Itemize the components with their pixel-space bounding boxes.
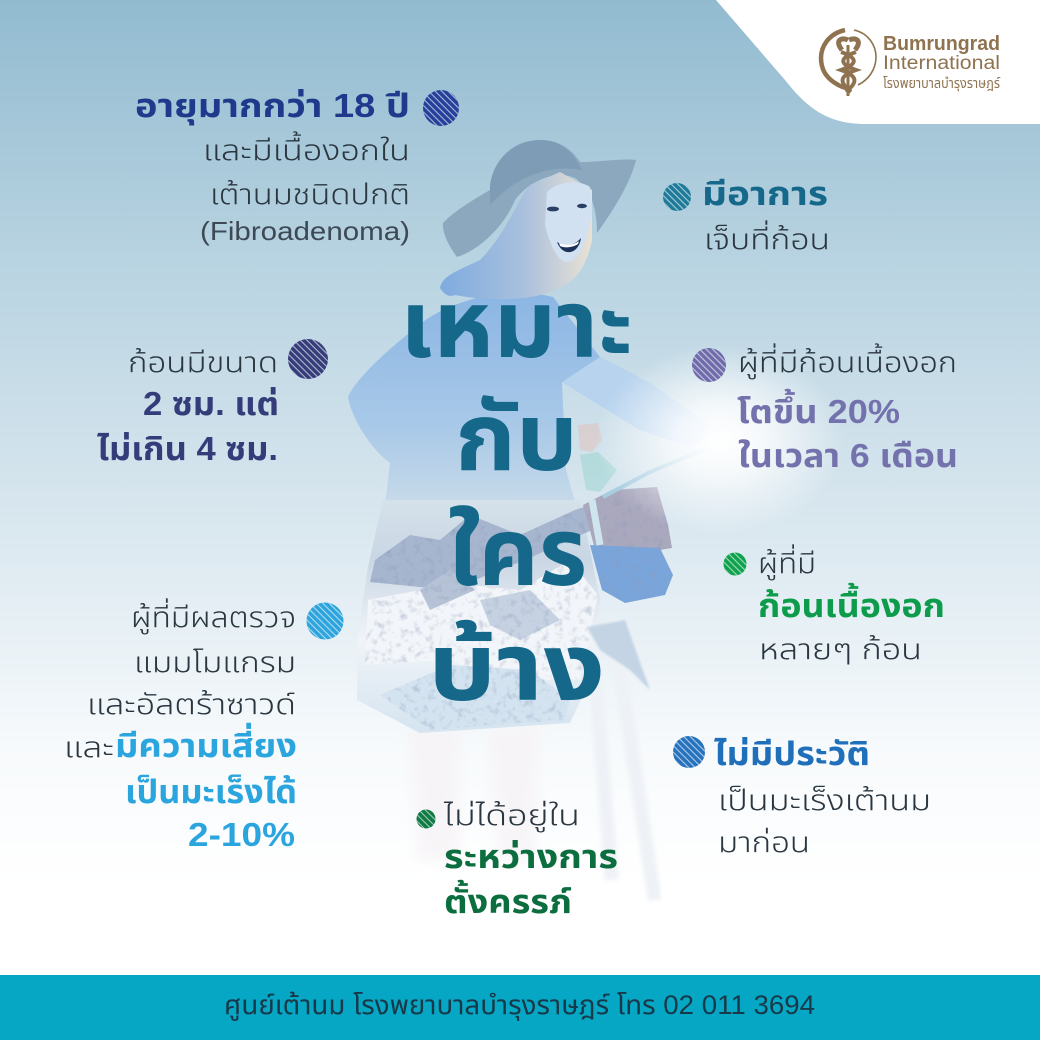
item: pain: มีอาการ bbox=[702, 175, 828, 212]
mountain ridges bbox=[365, 505, 598, 730]
hat brim bbox=[443, 140, 636, 257]
item: growth: ในเวลา 6 เดือน bbox=[738, 437, 958, 474]
item: growth: ผู้ที่มีก้อนเนื้องอก bbox=[738, 343, 957, 380]
item: mammogram results: 2-10% bbox=[188, 816, 295, 853]
title: บ้าง bbox=[428, 615, 605, 720]
item: pain bbox=[663, 175, 830, 256]
item: no cancer history: มาก่อน bbox=[718, 827, 810, 859]
item: multiple lumps: ก้อนเนื้องอก bbox=[758, 582, 945, 624]
item: lump size bbox=[97, 339, 328, 467]
item: age over 18: (Fibroadenoma) bbox=[200, 216, 410, 246]
item: age over 18: และมีเนื้องอกใน bbox=[203, 131, 410, 167]
front wheel bbox=[587, 620, 650, 690]
item: no cancer history: ไม่มีประวัติ bbox=[714, 735, 870, 772]
sweater bbox=[348, 290, 717, 540]
photo: woman with hat and bicycle bbox=[348, 140, 845, 900]
icon: caduceus bbox=[821, 30, 876, 96]
item: not pregnant: ตั้งครรภ์ bbox=[444, 879, 572, 920]
item: no cancer history bbox=[673, 735, 931, 859]
title bbox=[400, 272, 633, 720]
item: mammogram results: แมมโมแกรม bbox=[134, 647, 296, 679]
bullet bbox=[288, 339, 328, 379]
item: lump size: 2 ซม. แต่ bbox=[143, 385, 279, 422]
basket bbox=[583, 487, 673, 603]
face bbox=[545, 182, 592, 262]
item: mammogram results: เป็นมะเร็งได้ bbox=[125, 773, 297, 810]
bicycle frame bbox=[592, 620, 655, 900]
bullet bbox=[724, 552, 746, 576]
bullet bbox=[416, 810, 436, 828]
smile bbox=[557, 238, 581, 252]
title: กับ bbox=[455, 385, 578, 490]
bullet bbox=[306, 602, 344, 640]
item: multiple lumps: หลายๆ ก้อน bbox=[759, 634, 922, 666]
item: not pregnant: ระหว่างการ bbox=[444, 838, 618, 875]
item: not pregnant bbox=[416, 800, 618, 920]
item: multiple lumps: ผู้ที่มี bbox=[758, 544, 816, 581]
bullet bbox=[663, 183, 691, 211]
right glow bbox=[595, 345, 845, 535]
logo: โรงพยาบาลบำรุงราษฎร์ bbox=[883, 75, 1001, 92]
legs bbox=[408, 725, 540, 860]
item: mammogram results bbox=[64, 598, 344, 853]
eyes bbox=[547, 204, 587, 211]
item: mammogram results: และอัลตร้าซาวด์ bbox=[87, 689, 296, 721]
flowers bbox=[578, 423, 617, 492]
sleeve shade bbox=[562, 357, 717, 447]
item: growth bbox=[692, 343, 958, 474]
logo: International bbox=[883, 53, 1000, 74]
title: ใคร bbox=[448, 500, 587, 605]
item: not pregnant: ไม่ได้อยู่ใน bbox=[443, 800, 580, 833]
item: pain: เจ็บที่ก้อน bbox=[704, 220, 830, 256]
mountain skirt bbox=[357, 500, 600, 733]
bicycle stem bbox=[592, 500, 600, 545]
item: age over 18: เต้านมชนิดปกติ bbox=[210, 179, 410, 211]
wordmark: Bumrungrad bbox=[883, 33, 1000, 55]
hat crown bbox=[490, 140, 582, 205]
item: age over 18 bbox=[135, 87, 459, 246]
item: mammogram results: และ bbox=[64, 732, 114, 764]
white logo corner bbox=[716, 0, 1040, 124]
item: lump size: ไม่เกิน 4 ซม. bbox=[97, 430, 278, 467]
footer text: ศูนย์เต้านม โรงพยาบาลบำรุงราษฎร์ โทร 02 011 3694 bbox=[224, 990, 815, 1021]
item: growth: โตขึ้น 20% bbox=[737, 388, 900, 430]
bullet bbox=[673, 736, 705, 768]
item: multiple lumps bbox=[724, 544, 945, 666]
title: เหมาะ bbox=[400, 272, 633, 377]
item: lump size: ก้อนมีขนาด bbox=[128, 347, 278, 379]
hair bbox=[440, 172, 592, 299]
bullet bbox=[692, 348, 726, 382]
logo bbox=[821, 30, 1001, 96]
item: age over 18: อายุมากกว่า 18 ปี bbox=[135, 87, 410, 126]
bullet bbox=[423, 90, 459, 126]
item: no cancer history: เป็นมะเร็งเต้านม bbox=[718, 785, 931, 817]
footer bar bbox=[0, 975, 1040, 1040]
handlebar bbox=[603, 450, 703, 497]
item: mammogram results: มีความเสี่ยง bbox=[115, 722, 297, 764]
item: mammogram results: ผู้ที่มีผลตรวจ bbox=[131, 598, 296, 635]
